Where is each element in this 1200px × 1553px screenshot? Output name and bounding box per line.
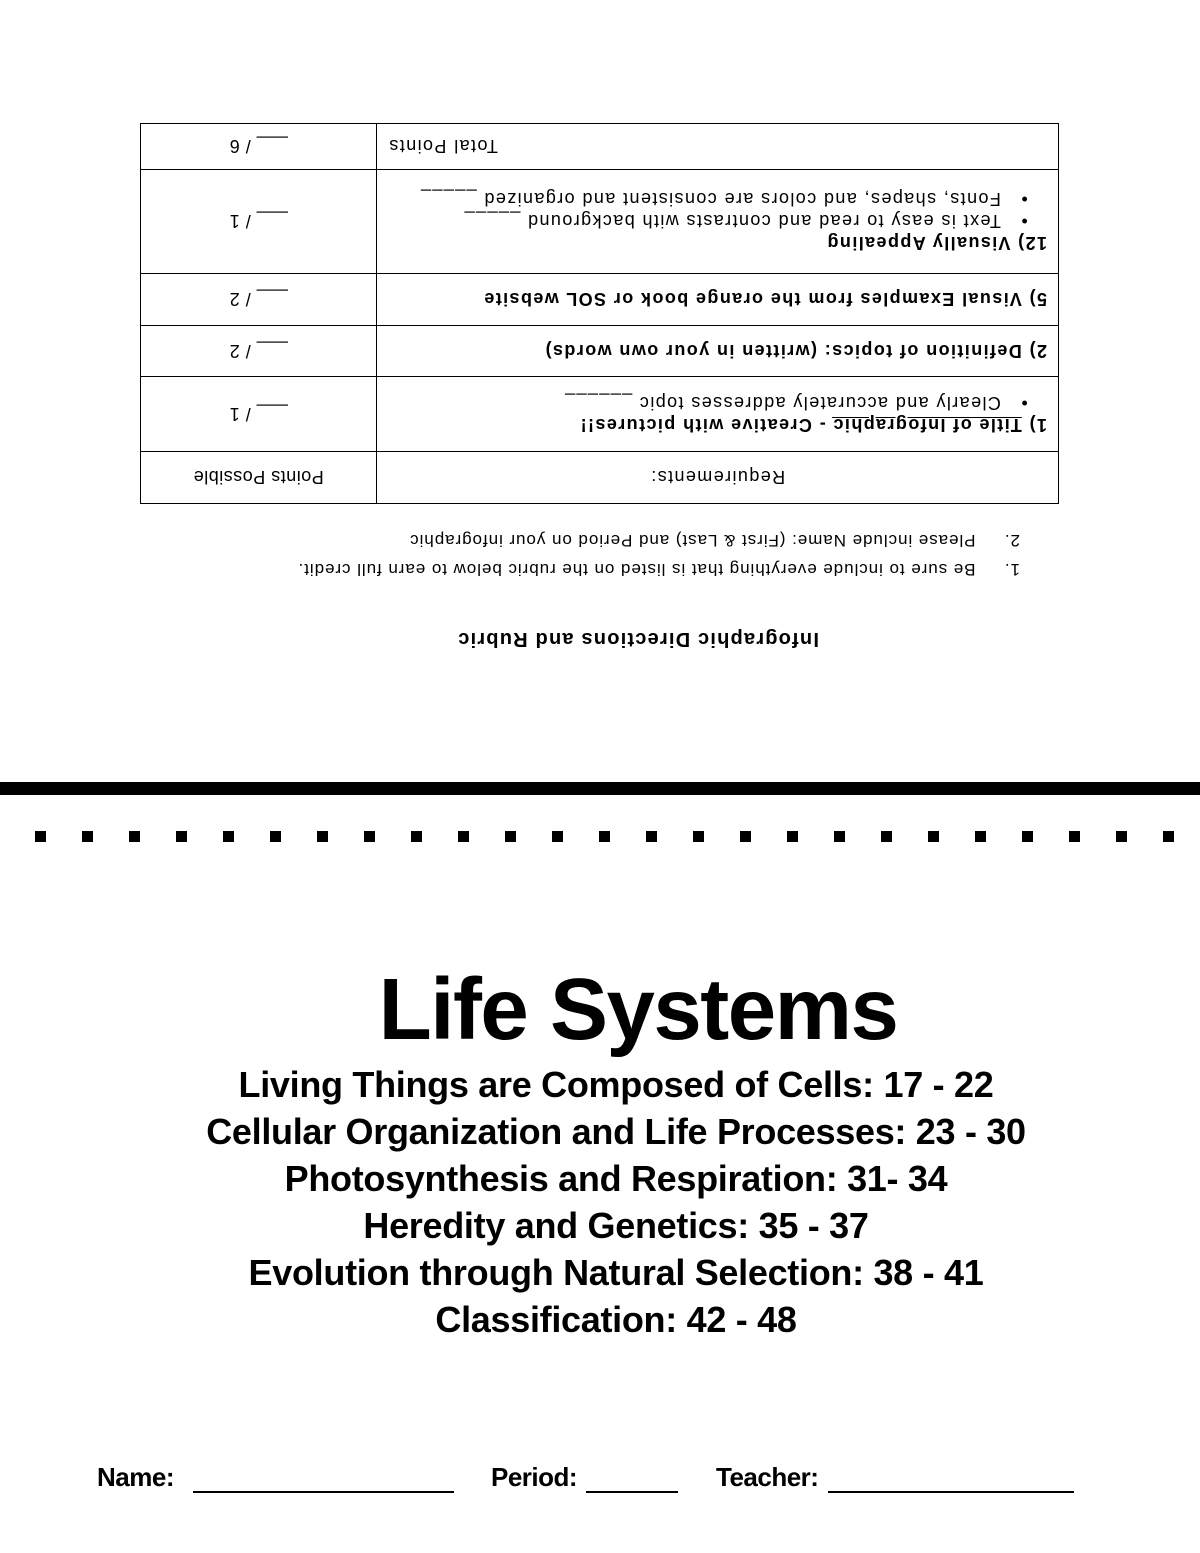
rubric table: 5) Visual Examples from the orange book or SOL website <box>483 290 1047 310</box>
rubric table <box>140 123 1059 504</box>
directions list: 2. Please include Name: (First & Last) and Period on your infographic <box>409 531 1020 550</box>
name / period / teacher fields <box>97 1462 1074 1493</box>
directions list <box>298 531 1020 579</box>
topic list: Heredity and Genetics: 35 - 37 <box>363 1205 869 1246</box>
rubric section (upside down) <box>140 123 1059 650</box>
rubric table: ___ / 6 <box>229 136 288 156</box>
rubric table: ___ / 2 <box>229 290 288 310</box>
topic list: Classification: 42 - 48 <box>435 1299 797 1340</box>
rubric table: Requirements: <box>650 468 785 488</box>
rubric table: • Fonts, shapes, and colors are consistent and organized _____ <box>420 190 1028 210</box>
rubric table: 1) Title of Infographic - Creative with pictures!! <box>579 415 1047 435</box>
topic list: Evolution through Natural Selection: 38 - 41 <box>249 1252 983 1293</box>
directions list: 1. Be sure to include everything that is listed on the rubric below to earn full credit. <box>298 560 1020 579</box>
rubric table: ___ / 1 <box>229 404 288 424</box>
rubric table: 12) Visually Appealing <box>826 234 1047 254</box>
rubric table: 2) Definition of topics: (written in your own words) <box>544 341 1047 361</box>
topic list <box>206 1064 1026 1340</box>
rubric table: Total Points <box>388 136 498 156</box>
name / period / teacher fields: Period: <box>491 1462 577 1492</box>
topic list: Cellular Organization and Life Processes: 23 - 30 <box>206 1111 1026 1152</box>
title: Life Systems <box>379 961 897 1058</box>
topic list: Photosynthesis and Respiration: 31- 34 <box>285 1158 947 1199</box>
dotted cut line <box>35 831 1174 842</box>
thick divider line <box>0 782 1200 795</box>
name / period / teacher fields: Teacher: <box>716 1462 818 1492</box>
name / period / teacher fields: Name: <box>97 1462 174 1492</box>
rubric table: • Clearly and accurately addresses topic ______ <box>564 393 1028 413</box>
rubric table: • Text is easy to read and contrasts with background _____ <box>463 212 1028 232</box>
rubric table: Points Possible <box>193 468 324 488</box>
rubric table: ___ / 2 <box>229 341 288 361</box>
rubric table: ___ / 1 <box>229 212 288 232</box>
rubric heading: Infographic Directions and Rubric <box>457 628 819 650</box>
topic list: Living Things are Composed of Cells: 17 - 22 <box>239 1064 993 1105</box>
